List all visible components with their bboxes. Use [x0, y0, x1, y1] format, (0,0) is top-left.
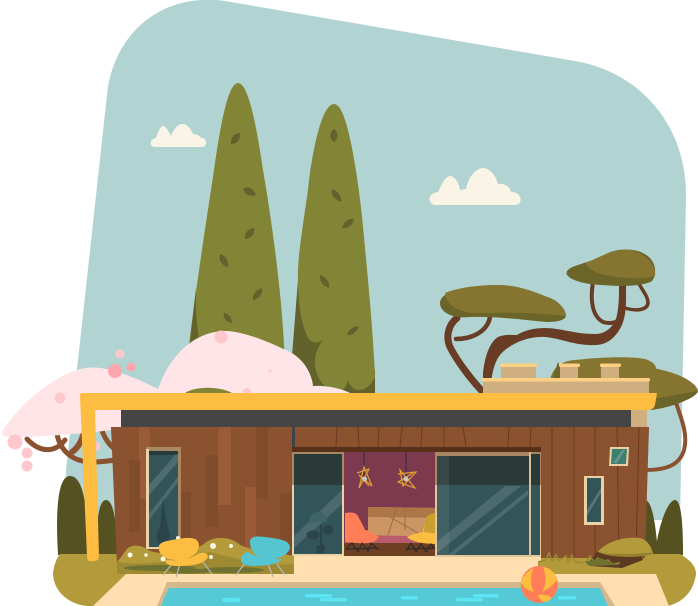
right wall tall window	[584, 476, 604, 525]
blossom dots	[8, 330, 272, 472]
pool	[157, 582, 615, 606]
right wood wall	[541, 427, 649, 558]
pink blossom tree	[2, 330, 352, 472]
wall planks	[129, 427, 292, 562]
bonsai tree with two canopies	[440, 249, 655, 393]
cloud left	[151, 124, 206, 147]
fascia end	[631, 410, 647, 427]
blossom branches	[27, 425, 120, 462]
shrub shadows	[124, 565, 264, 574]
left canopy	[440, 285, 566, 322]
leaves left	[219, 133, 262, 323]
rooftop planters	[481, 364, 650, 394]
grass tufts and small bush	[538, 538, 653, 574]
branches	[448, 282, 648, 390]
small bushes	[57, 476, 683, 555]
left tall window	[146, 447, 181, 549]
ground	[53, 554, 696, 606]
sky background shape	[66, 0, 686, 520]
left wood wall	[111, 427, 292, 565]
house	[111, 410, 649, 565]
cypress tree right	[289, 104, 375, 394]
interior yellow chair	[406, 513, 440, 552]
upper canopy	[567, 249, 655, 286]
beach ball	[521, 566, 558, 603]
pendant lamp left	[357, 452, 372, 488]
yellow lounge chair	[159, 538, 212, 577]
right wall plank lines	[552, 427, 639, 558]
front shrubs	[117, 536, 294, 574]
sofa	[345, 507, 440, 543]
cloud right	[429, 168, 521, 205]
cypress tree left	[187, 83, 286, 370]
deck	[93, 555, 669, 606]
beam	[292, 447, 542, 452]
left glass door	[292, 452, 344, 556]
right wall small window	[609, 447, 629, 466]
interior back wall	[340, 452, 450, 556]
blue lounge chair	[236, 537, 290, 577]
upper plank band	[295, 427, 545, 447]
water ripples	[222, 594, 576, 602]
interior floor	[340, 543, 450, 556]
yellow roof frame	[80, 393, 657, 561]
pendant lamp right	[398, 452, 416, 488]
rear canopy on the right	[550, 357, 698, 470]
leaves right	[320, 129, 359, 335]
trunk	[483, 285, 626, 393]
right sliding glass door	[435, 452, 541, 557]
dark fascia	[121, 410, 631, 427]
blossom canopies	[2, 331, 352, 437]
orange chair	[345, 512, 379, 552]
silhouette plant	[306, 512, 333, 553]
shrub flowers	[128, 536, 233, 562]
